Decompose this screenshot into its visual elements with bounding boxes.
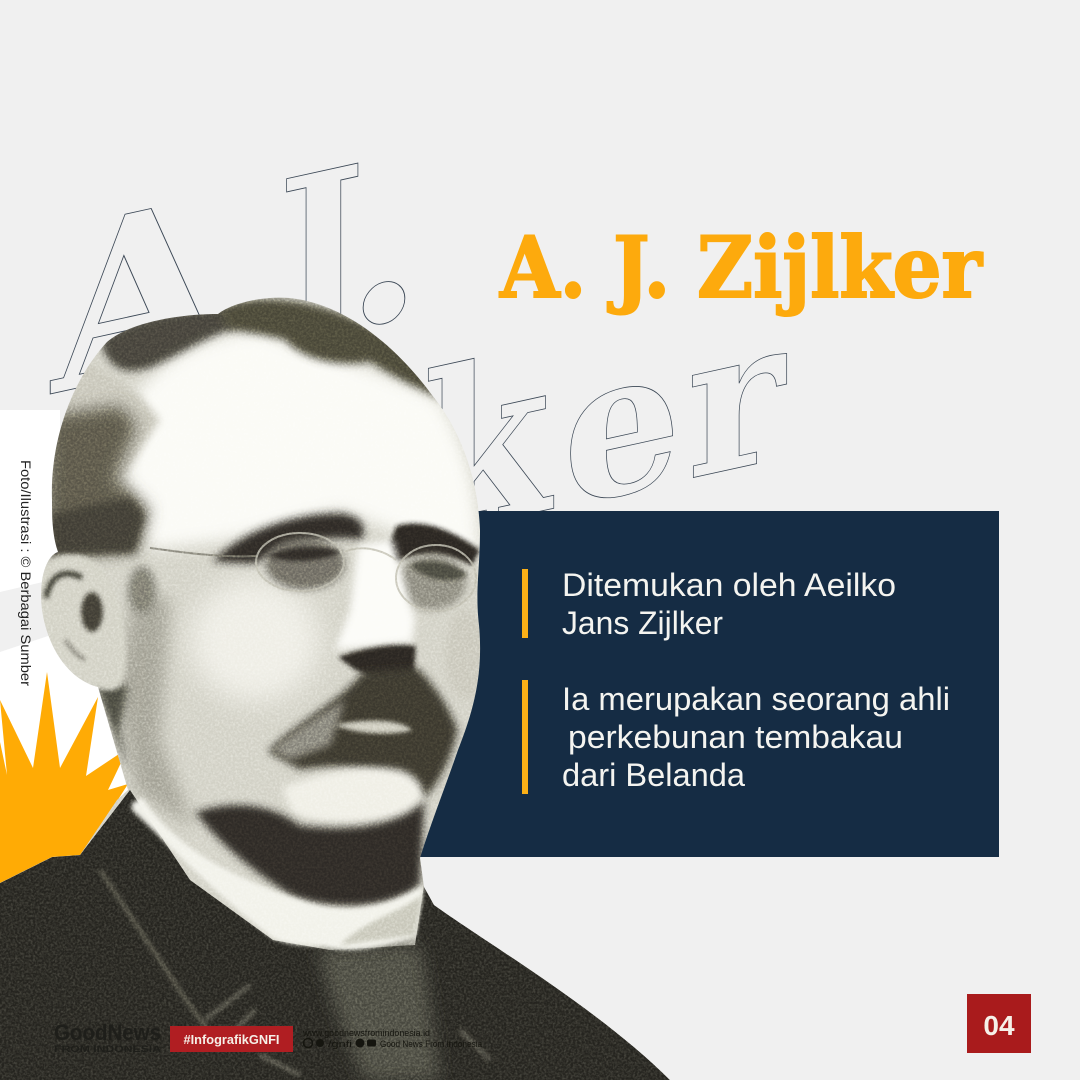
jacket (0, 790, 670, 1080)
footer links: www.goodnewsfromindonesia.id (302, 1028, 430, 1039)
footer links (302, 1028, 483, 1050)
nose bridge highlight (335, 540, 415, 650)
accent bar 2 (522, 680, 528, 794)
hashtag badge: #InfografikGNFI (184, 1032, 280, 1047)
hair (45, 299, 445, 560)
lip (335, 721, 412, 733)
jaw side shade (115, 590, 195, 830)
panel: description (415, 511, 999, 857)
nostril shade (338, 645, 416, 680)
text block 1: Ditemukan oleh Aeilko (562, 567, 896, 603)
outline text: A. J.: A (50, 145, 229, 447)
eye shadows (265, 538, 345, 590)
moustache (268, 668, 458, 798)
text block 2: dari Belanda (562, 757, 745, 793)
outline text: A. J.: J (264, 115, 365, 400)
right cheek shadow (448, 614, 480, 696)
footer logo (54, 1020, 161, 1055)
page number (967, 994, 1031, 1053)
grey diagonal sliver (0, 578, 60, 652)
footer links: Good News From Indonesia (380, 1039, 483, 1050)
jacket speckle (0, 780, 700, 1080)
cheek light (190, 578, 320, 702)
chin highlight (282, 768, 422, 822)
beard (195, 800, 425, 906)
collar (132, 798, 424, 950)
page number: 04 (983, 1010, 1015, 1041)
text block 2: perkebunan tembakau (568, 719, 903, 755)
outline text: ker (422, 250, 787, 590)
outline text: ker: k (422, 301, 555, 590)
photo credit: Foto/Ilustrasi : © Berbagai Sumber (18, 460, 33, 687)
footer links: /gnfi (328, 1039, 352, 1050)
glasses (150, 533, 476, 611)
ear (41, 555, 156, 690)
outline text: ker: e (563, 295, 681, 553)
forehead highlight (125, 330, 480, 560)
text block 2: Ia merupakan seorang ahli (562, 681, 950, 717)
text block 1: Jans Zijlker (562, 605, 723, 641)
moustache light tip (270, 700, 345, 760)
title: A. J. Zijlker (499, 218, 984, 317)
outline text: A. J.: . (345, 103, 423, 383)
footer logo: FROM INDONESIA (54, 1044, 161, 1055)
footer logo: GoodNews (54, 1020, 161, 1045)
white background band (0, 410, 140, 900)
neck shadow (96, 685, 128, 770)
icon: orange sunburst (0, 672, 128, 883)
portrait photo (0, 298, 670, 1080)
eyebrows (212, 513, 364, 564)
accent bar 1 (522, 569, 528, 638)
outline text: ker: r (687, 272, 787, 526)
hashtag badge (170, 1026, 293, 1052)
photo grain (0, 298, 665, 1080)
outline text: A. J. (50, 102, 423, 447)
